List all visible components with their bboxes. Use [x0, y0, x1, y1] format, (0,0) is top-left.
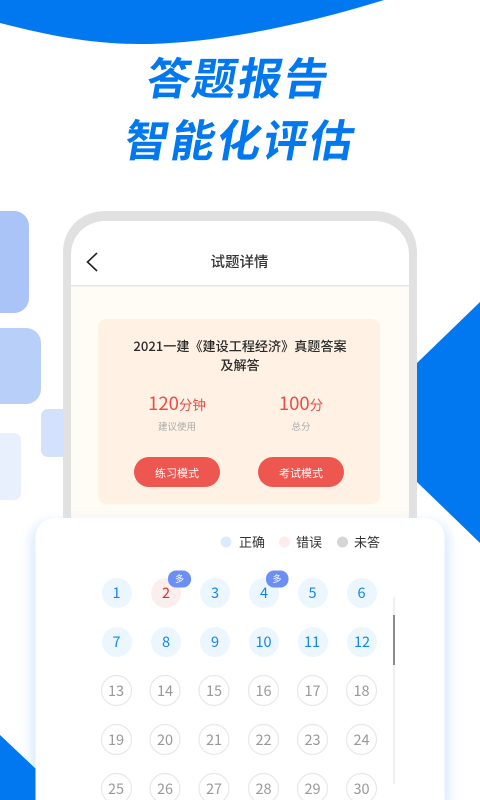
- decorative blue rounded blocks: [0, 211, 81, 500]
- unanswered questions row 4: 23: [304, 729, 321, 750]
- unanswered questions row 5: 30: [353, 778, 370, 799]
- legend: 错误: [296, 532, 322, 551]
- answered questions row 1: [102, 578, 377, 608]
- stat: suggested time: [148, 390, 206, 433]
- unanswered questions row 4: 21: [206, 729, 222, 750]
- unanswered questions row 4: 19: [108, 729, 124, 750]
- title: 答题报告: [142, 44, 337, 107]
- unanswered questions row 3: 13: [108, 680, 124, 701]
- unanswered questions row 4: 24: [353, 729, 370, 750]
- stat: total score: 100分: [279, 390, 323, 416]
- title: [120, 44, 362, 169]
- unanswered questions row 3: 18: [353, 680, 370, 701]
- answered questions row 1: 1: [112, 582, 121, 603]
- right blue hexagon shape: [417, 302, 480, 543]
- exam mode button: [258, 457, 344, 487]
- phone screen header: [71, 221, 409, 285]
- scrollbar: [393, 597, 395, 784]
- unanswered questions row 5: [102, 774, 376, 800]
- phone screen body: [71, 285, 409, 520]
- unanswered questions row 3: 16: [255, 680, 272, 701]
- legend: 未答: [354, 532, 380, 551]
- answered questions row 1: 2: [162, 582, 170, 603]
- multi-choice badges: [168, 570, 288, 588]
- unanswered questions row 5: 25: [108, 778, 124, 799]
- bottom-left blue hexagon shape: [0, 735, 36, 800]
- unanswered questions row 3: 15: [206, 680, 222, 701]
- answered questions row 2: 12: [354, 631, 370, 652]
- top blue wave: [0, 0, 384, 44]
- answered questions row 1: 3: [211, 582, 219, 603]
- multi-choice badges: 多: [272, 572, 282, 585]
- legend: [220, 532, 380, 551]
- exam title: 2021一建《建设工程经济》真题答案: [133, 336, 347, 355]
- exam mode button: 考试模式: [279, 465, 323, 481]
- answered questions row 2: 11: [304, 631, 320, 652]
- answered questions row 1: 6: [357, 582, 366, 603]
- stat: total score: 总分: [291, 419, 311, 433]
- multi-choice badges: 多: [175, 572, 184, 585]
- answered questions row 1: 5: [308, 582, 317, 603]
- exam title: 及解答: [220, 355, 260, 374]
- unanswered questions row 3: 17: [304, 680, 321, 701]
- stat: suggested time: 120分钟: [148, 390, 206, 416]
- answered questions row 1: 4: [260, 582, 268, 603]
- unanswered questions row 4: [102, 724, 376, 754]
- title: 智能化评估: [120, 106, 362, 169]
- unanswered questions row 5: 29: [304, 778, 321, 799]
- stat: total score: [279, 390, 323, 433]
- exam info card: [98, 319, 380, 504]
- header title: 试题详情: [210, 251, 268, 272]
- unanswered questions row 4: 20: [157, 729, 173, 750]
- phone mockup: [63, 211, 417, 520]
- answered questions row 2: 8: [162, 631, 170, 652]
- unanswered questions row 5: 28: [255, 778, 272, 799]
- practice mode button: [134, 457, 220, 487]
- answered questions row 2: 7: [112, 631, 121, 652]
- practice mode button: 练习模式: [155, 465, 199, 481]
- answered questions row 2: [102, 627, 377, 657]
- answered questions row 2: 10: [255, 631, 272, 652]
- answered questions row 2: 9: [211, 631, 219, 652]
- stat: suggested time: 建议使用: [158, 419, 196, 433]
- unanswered questions row 3: 14: [157, 680, 173, 701]
- legend: 正确: [239, 532, 265, 551]
- unanswered questions row 5: 27: [206, 778, 222, 799]
- unanswered questions row 3: [102, 676, 376, 706]
- unanswered questions row 4: 22: [255, 729, 272, 750]
- unanswered questions row 5: 26: [157, 778, 173, 799]
- back arrow icon: [88, 253, 97, 271]
- answer sheet card: [36, 518, 444, 800]
